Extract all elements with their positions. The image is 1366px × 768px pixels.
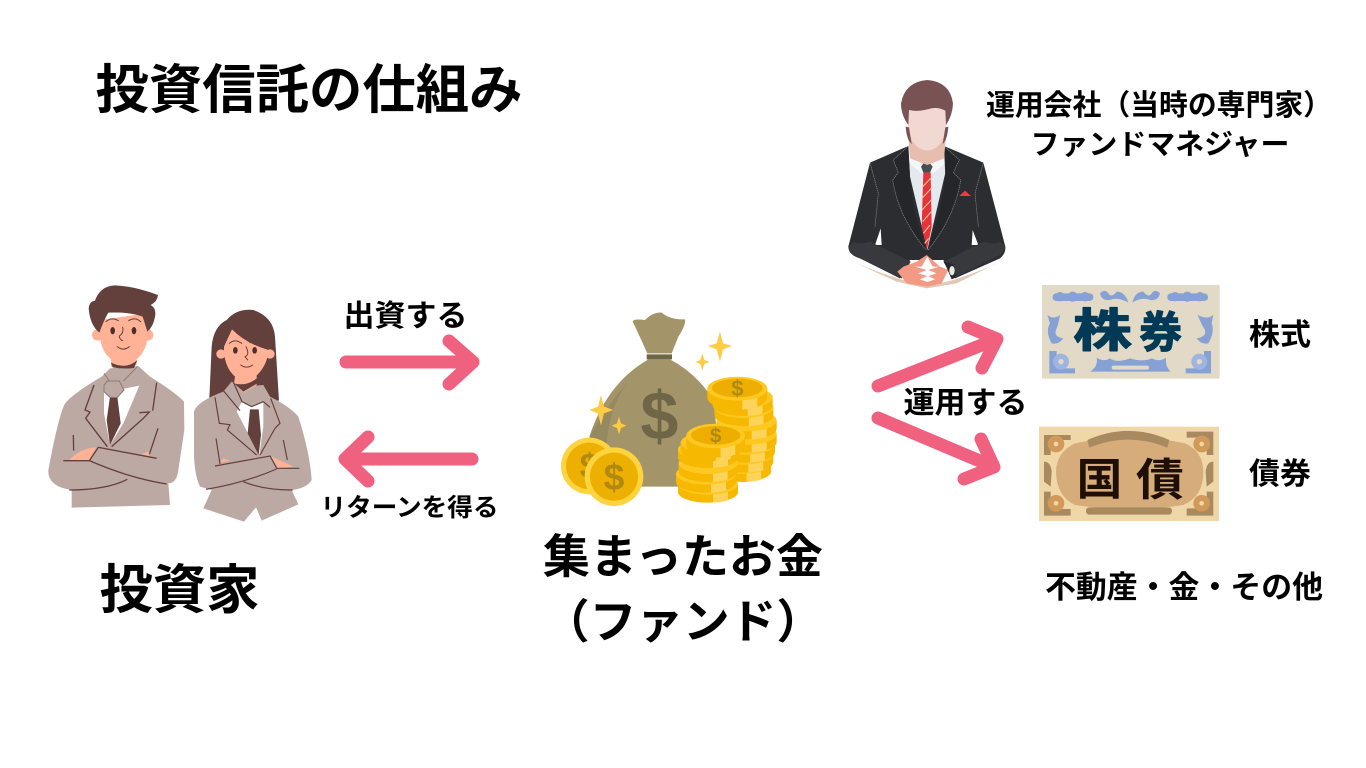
icon: loose coins: $ bbox=[604, 455, 625, 497]
icon: fund manager bbox=[848, 80, 1005, 288]
icon: female investor bbox=[194, 310, 312, 522]
icon: government bond: 債 bbox=[1136, 456, 1184, 505]
icon: money bag and coins bbox=[561, 313, 777, 506]
label: other assets: 不動産・金・その他 bbox=[1045, 570, 1323, 605]
heading: pooled money: 集まったお金 bbox=[543, 531, 823, 583]
icon: money bag bbox=[589, 313, 723, 487]
icon: coin stack front: $ bbox=[710, 425, 722, 448]
heading: fund: （ファンド） bbox=[543, 596, 823, 648]
icon: loose coins: $ bbox=[580, 447, 599, 486]
arrow: invest bbox=[346, 341, 473, 384]
title: 投資信託の仕組み bbox=[96, 61, 522, 120]
icon: male investor bbox=[48, 285, 184, 508]
arrow: to stocks bbox=[878, 327, 997, 386]
label: manage: 運用する bbox=[904, 387, 1028, 420]
label: manager line 2: ファンドマネジャー bbox=[1030, 129, 1290, 161]
label: bonds: 債券 bbox=[1249, 458, 1311, 491]
icon: government bond bbox=[1039, 427, 1219, 521]
icon: coin stack front bbox=[676, 424, 745, 503]
label: manager line 1: 運用会社（当時の専門家） bbox=[986, 90, 1332, 122]
heading: investors: 投資家 bbox=[100, 561, 260, 620]
icon: stock certificate: 券 bbox=[1139, 310, 1182, 358]
icon: stock certificate: 株 bbox=[1073, 306, 1132, 357]
label: stocks: 株式 bbox=[1249, 319, 1311, 352]
icon: stock certificate bbox=[1042, 285, 1220, 379]
arrow: to bonds bbox=[878, 418, 994, 479]
icon: government bond: 国 bbox=[1077, 455, 1122, 504]
icon: coin stack back: $ bbox=[731, 376, 743, 401]
icon: coin stack back bbox=[707, 376, 777, 482]
icon: sparkles bbox=[589, 332, 732, 434]
icon: money bag: $ bbox=[640, 378, 678, 454]
icon: investors bbox=[48, 285, 312, 522]
arrow: return bbox=[345, 437, 472, 481]
label: return: リターンを得る bbox=[320, 494, 498, 522]
icon: loose coins bbox=[561, 438, 643, 506]
label: invest: 出資する bbox=[344, 300, 468, 333]
